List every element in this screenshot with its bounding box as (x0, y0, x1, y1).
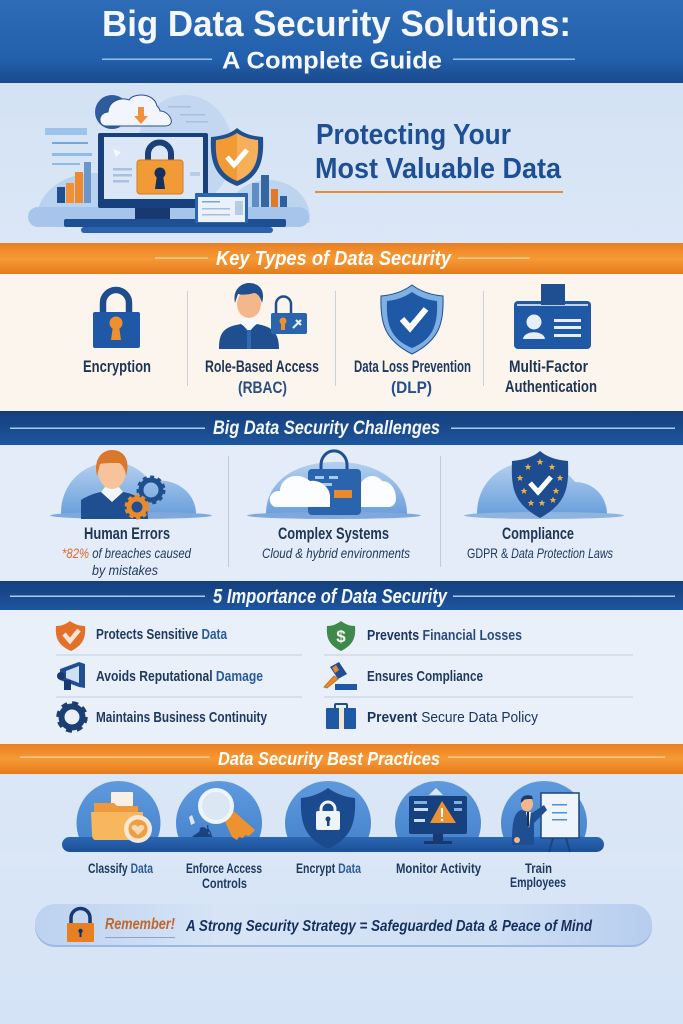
icon: folder (91, 792, 152, 843)
text: human errors: Human Errors (84, 525, 170, 543)
label: encryption: Encryption (83, 358, 151, 376)
section header: key types: Key Types of Data Security (216, 248, 452, 270)
icon: compliance (464, 451, 624, 519)
document card (195, 193, 248, 223)
label: DLP: (DLP) (391, 378, 432, 397)
monitor (98, 133, 208, 221)
circles and shelf (0, 781, 683, 866)
bar chart: right (252, 175, 287, 207)
header banner (0, 0, 683, 83)
text: human errors: *82% of breaches caused (62, 545, 192, 561)
section header: key types (0, 243, 683, 274)
callout: remember (35, 904, 652, 947)
icon: role-based access person (219, 283, 307, 349)
label: enforce access controls: Enforce Access (186, 860, 262, 876)
icon: callout padlock (67, 908, 94, 942)
item: protects sensitive data: Protects Sensitive Data (96, 626, 228, 643)
label: enforce access controls (186, 860, 262, 891)
icon: orange shield check (211, 128, 263, 186)
item: prevents financial losses (327, 621, 522, 651)
label: train employees: Train (525, 860, 552, 876)
text: complex systems: Cloud & hybrid environments (262, 545, 410, 561)
bar chart: left (57, 162, 91, 203)
icon: human errors (50, 450, 212, 519)
label: DLP (354, 358, 471, 397)
panel: hero (28, 94, 563, 233)
panel: importance (0, 610, 683, 744)
text: compliance: Compliance (502, 525, 574, 543)
label: classify data: Classify Data (88, 860, 153, 876)
label: train employees (510, 860, 566, 890)
item: ensures compliance (324, 662, 483, 690)
text: compliance: GDPR & Data Protection Laws (467, 545, 613, 561)
label: RBAC: Role-Based Access (205, 358, 319, 376)
item: ensures compliance: Ensures Compliance (367, 668, 483, 685)
item: prevents financial losses: $ (336, 627, 346, 646)
icon: complex systems (247, 451, 421, 519)
callout text: A Strong Security Strategy = Safeguarded Data & Peace of Mind (185, 918, 593, 935)
text: complex systems: Complex Systems (278, 525, 389, 543)
text: compliance (467, 525, 613, 561)
icon: data loss prevention shield (381, 285, 443, 354)
item: maintains business continuity (58, 703, 268, 731)
item: prevent secure data policy: Prevent Secure Data Policy (367, 709, 538, 726)
icon: encryption padlock (93, 290, 140, 348)
label: RBAC: (RBAC) (238, 379, 287, 397)
item: prevents financial losses: Prevents Financial Losses (367, 627, 522, 644)
icon: trainer with board (512, 793, 579, 852)
icon: padlock (137, 142, 183, 194)
label: multi-factor authentication: Multi-Factor (509, 358, 588, 376)
panel: challenges (0, 445, 683, 581)
item: avoids reputational damage: Avoids Reputational Damage (96, 668, 263, 685)
item: maintains business continuity: Maintains Business Continuity (96, 709, 268, 726)
text: human errors: by mistakes (92, 562, 158, 578)
text: complex systems (262, 525, 410, 561)
item: protects sensitive data (56, 621, 228, 651)
icon: multi-factor id badge (514, 284, 591, 349)
hero heading: Most Valuable Data (315, 153, 562, 185)
item: avoids reputational damage (57, 662, 263, 690)
section header: importance (0, 581, 683, 610)
hero heading: Protecting Your (316, 119, 511, 151)
label: monitor activity: Monitor Activity (396, 860, 481, 876)
label: RBAC (205, 358, 319, 397)
label: DLP: Data Loss Prevention (354, 358, 471, 376)
label: multi-factor authentication (505, 358, 597, 396)
section header: challenges (0, 411, 683, 445)
callout text (105, 916, 593, 938)
icon: encrypt shield (301, 788, 355, 849)
section header: challenges: Big Data Security Challenges (213, 418, 440, 439)
panel: best practices (0, 774, 683, 1024)
panel: key types (0, 274, 683, 411)
base bars (64, 219, 286, 233)
icon: monitor alert (409, 788, 467, 844)
label: encrypt data: Encrypt Data (296, 860, 361, 876)
text: human errors (62, 525, 192, 578)
icon: cloud download (95, 95, 171, 129)
icon: magnifier key (189, 790, 255, 840)
hero illustration: secured computer (28, 94, 310, 233)
section header: importance: 5 Importance of Data Security (213, 586, 448, 608)
hero heading (315, 119, 563, 193)
item: prevent secure data policy (326, 704, 538, 729)
title: Big Data Security Solutions: (102, 3, 571, 44)
label: train employees: Employees (510, 874, 566, 890)
section header: best practices: Data Security Best Practices (218, 749, 440, 769)
callout text: Remember! (105, 916, 176, 933)
section header: best practices (0, 744, 683, 774)
label: enforce access controls: Controls (202, 875, 247, 891)
subtitle: A Complete Guide (222, 48, 442, 74)
label: multi-factor authentication: Authentication (505, 378, 597, 396)
